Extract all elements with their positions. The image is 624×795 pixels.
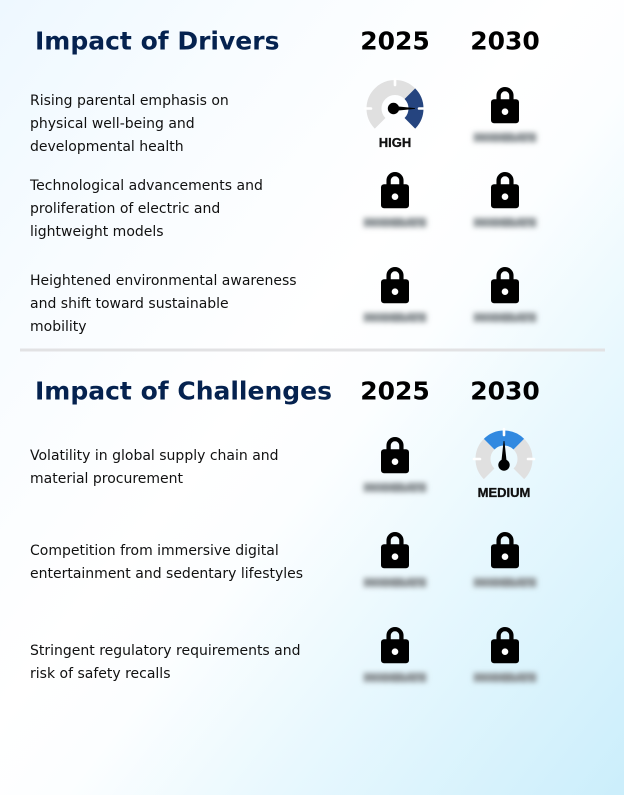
driver text 3: mobility (30, 319, 87, 335)
blurred label: MODERATE (364, 218, 426, 229)
blurred label: MODERATE (364, 313, 426, 324)
lock 2025 challenge row 3 (381, 629, 409, 663)
driver text 3: and shift toward sustainable (30, 296, 229, 312)
gauge: high (365, 79, 425, 150)
blurred label: MODERATE (364, 673, 426, 684)
blurred label: MODERATE (474, 313, 536, 324)
lock 2030 challenge row 2 (491, 534, 519, 568)
challenge text 2: entertainment and sedentary lifestyles (30, 566, 303, 582)
lock 2030 row 3 (491, 269, 519, 303)
heading: impact of drivers: Impact of Drivers (35, 26, 279, 56)
challenge text 3: risk of safety recalls (30, 666, 170, 682)
challenge text 1: Volatility in global supply chain and (30, 448, 279, 464)
heading: impact of challenges: Impact of Challenges (35, 376, 332, 406)
lock 2025 challenge row 1 (381, 439, 409, 473)
gauge: medium (474, 429, 534, 500)
blurred label: MODERATE (474, 133, 536, 144)
blurred label: MODERATE (364, 578, 426, 589)
driver text 1: Rising parental emphasis on (30, 93, 229, 109)
driver text 1: developmental health (30, 139, 184, 155)
year header 2030: 2030 (470, 26, 540, 56)
lock 2030 row 2 (491, 174, 519, 208)
lock 2025 row 2 (381, 174, 409, 208)
year header 2025: 2025 (360, 376, 430, 406)
driver text 2: lightweight models (30, 224, 164, 240)
driver text 2: Technological advancements and (29, 178, 263, 194)
blurred label: MODERATE (364, 483, 426, 494)
driver text 3: Heightened environmental awareness (30, 273, 297, 289)
lock 2030 challenge row 3 (491, 629, 519, 663)
year header 2025: 2025 (360, 26, 430, 56)
year header 2030: 2030 (470, 376, 540, 406)
challenge text 2: Competition from immersive digital (30, 543, 279, 559)
lock 2030 row 1 (491, 89, 519, 123)
blurred label: MODERATE (474, 578, 536, 589)
driver text 2: proliferation of electric and (30, 201, 220, 217)
challenge text 3: Stringent regulatory requirements and (30, 643, 301, 659)
blurred label: MODERATE (474, 218, 536, 229)
lock 2025 challenge row 2 (381, 534, 409, 568)
lock 2025 row 3 (381, 269, 409, 303)
driver text 1: physical well-being and (30, 116, 195, 132)
challenge text 1: material procurement (30, 471, 184, 487)
gauge label medium: MEDIUM (478, 485, 530, 500)
gauge label high: HIGH (379, 135, 411, 150)
blurred label: MODERATE (474, 673, 536, 684)
